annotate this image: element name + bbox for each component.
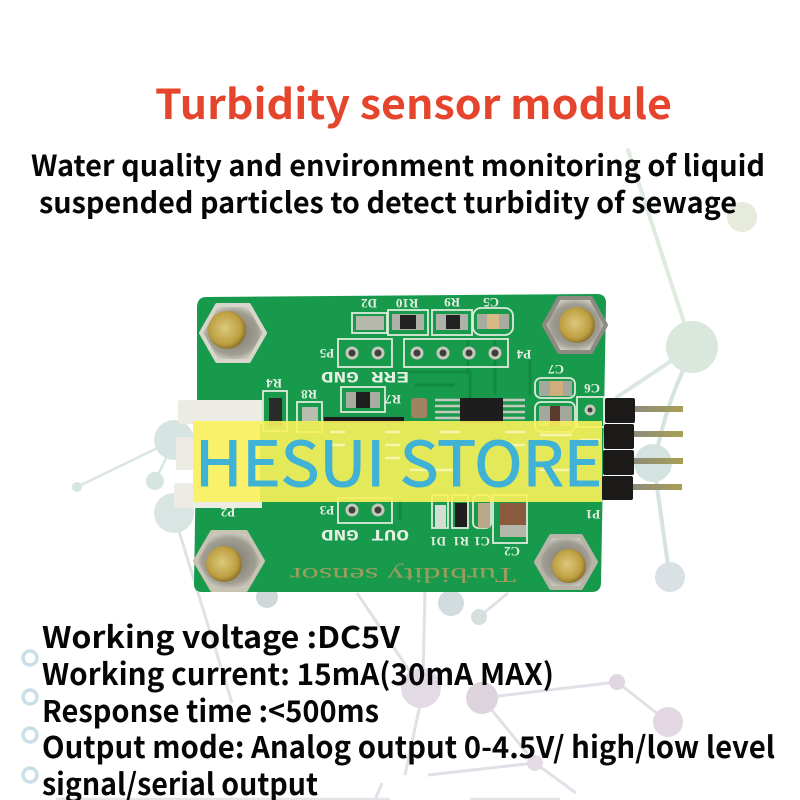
component labels: D1 xyxy=(430,534,446,549)
component labels: P1 xyxy=(586,507,600,522)
component labels: R4 xyxy=(266,376,282,391)
silkscreen product name: Turbidity sensor xyxy=(290,563,516,587)
specifications list: Working current: 15mA(30mA MAX) xyxy=(42,650,554,694)
network: left xyxy=(72,420,232,703)
component labels: R1 xyxy=(453,534,469,549)
component labels xyxy=(221,295,600,559)
component labels: D2 xyxy=(361,296,377,311)
specifications list: Working voltage :DC5V xyxy=(42,613,400,657)
component labels: R7 xyxy=(385,392,401,407)
component labels: P5 xyxy=(319,346,334,361)
sensor circuit board xyxy=(174,294,683,592)
specifications list xyxy=(42,613,775,800)
watermark banner: HESUI STORE xyxy=(195,414,602,504)
component labels: R8 xyxy=(301,387,317,402)
mounting bolts xyxy=(195,298,606,590)
title: Turbidity sensor module xyxy=(155,71,672,131)
connector over board xyxy=(193,400,262,508)
component labels: C1 xyxy=(474,534,490,549)
network: lower xyxy=(56,586,683,800)
subtitle xyxy=(31,143,765,222)
component labels: OUT GND xyxy=(321,525,409,543)
component labels: C7 xyxy=(548,362,564,377)
specifications list: Output mode: Analog output 0-4.5V/ high/low level xyxy=(42,723,775,767)
white connector xyxy=(174,400,262,508)
component labels: R9 xyxy=(444,295,460,310)
traces xyxy=(300,340,530,520)
specifications list: Response time :<500ms xyxy=(42,687,379,731)
pin header xyxy=(602,398,683,500)
network: upper right xyxy=(617,150,757,592)
component labels: C5 xyxy=(483,295,499,310)
component labels: P2 xyxy=(221,505,235,520)
network: ring nodes xyxy=(23,651,37,782)
through holes xyxy=(347,348,594,515)
silkscreen boxes xyxy=(263,308,604,543)
component labels: R10 xyxy=(396,296,418,311)
component labels: ERR GND xyxy=(321,367,409,385)
component labels: C6 xyxy=(584,381,600,396)
component labels: P4 xyxy=(516,347,531,362)
component labels: C2 xyxy=(504,544,520,559)
PCB outline xyxy=(194,294,606,592)
faint board detail under banner xyxy=(330,432,600,470)
component labels: P3 xyxy=(319,503,334,518)
background molecular network xyxy=(23,150,757,800)
subtitle: suspended particles to detect turbidity of sewage xyxy=(39,180,737,222)
subtitle: Water quality and environment monitoring of liquid xyxy=(31,143,765,185)
surface mount parts xyxy=(269,314,572,537)
